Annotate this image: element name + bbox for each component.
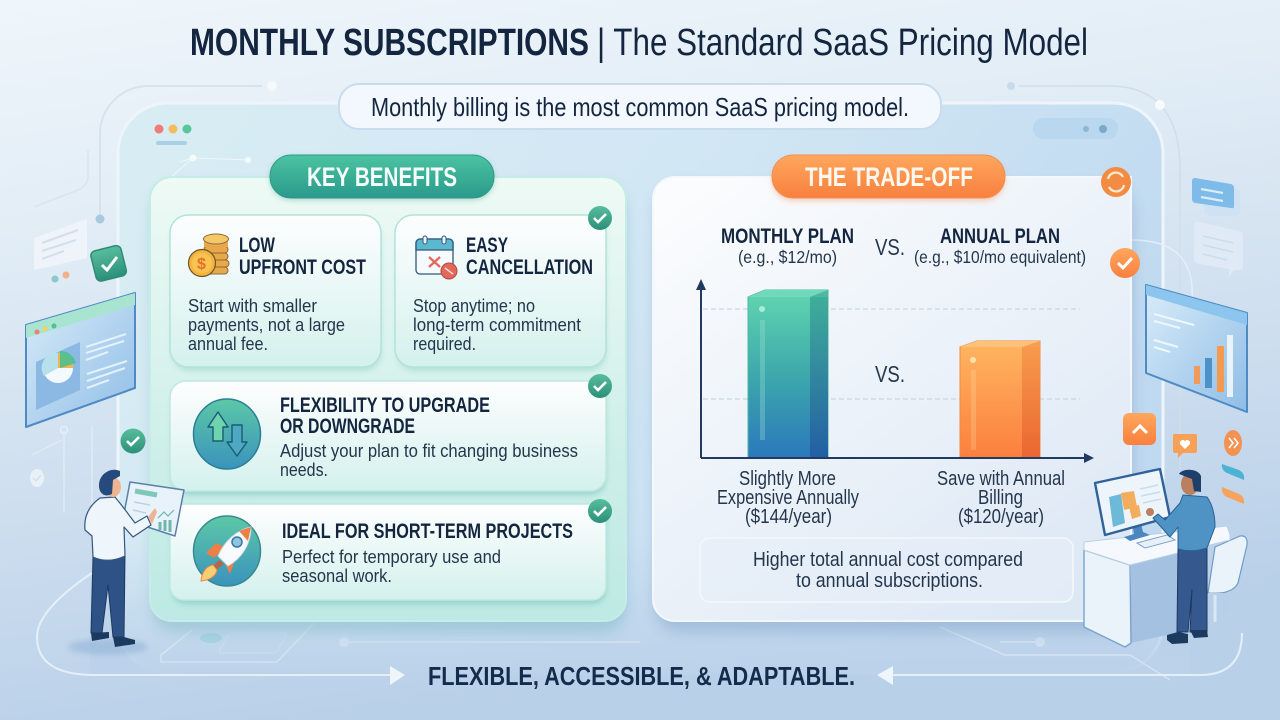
text: easy cancellation: required. — [413, 333, 476, 354]
text: short-term projects — [282, 546, 501, 586]
heading: flexibility: FLEXIBILITY TO UPGRADE — [280, 394, 490, 417]
arrow: footer right — [877, 666, 893, 685]
callout: higher annual cost — [700, 538, 1073, 602]
icon: orange refresh badge — [1101, 167, 1131, 197]
icon: check badge card 3 — [588, 374, 612, 398]
icon: coins: $ — [197, 256, 206, 273]
decorative colour tabs — [1222, 464, 1244, 504]
label: annual plan: (e.g., $10/mo equivalent) — [914, 247, 1086, 267]
person: right at desk — [1084, 469, 1247, 647]
label: vs top: VS. — [875, 234, 905, 260]
card: short-term projects — [170, 504, 606, 604]
title: MONTHLY SUBSCRIPTIONS — [190, 22, 589, 64]
text: easy cancellation — [413, 295, 581, 354]
chat bubbles right — [1192, 178, 1243, 277]
heading: key benefits: KEY BENEFITS — [307, 162, 457, 192]
chart axes — [696, 279, 1094, 463]
tablet — [123, 482, 184, 536]
label: annual plan: ANNUAL PLAN — [940, 225, 1060, 248]
arrow: footer left — [390, 666, 405, 685]
text: easy cancellation: Stop anytime; no — [413, 295, 535, 316]
card: easy cancellation — [395, 215, 606, 371]
text: easy cancellation: long-term commitment — [413, 314, 581, 335]
icon: heart bubble — [1173, 434, 1197, 458]
background app window frame — [30, 81, 1192, 675]
head — [105, 477, 121, 497]
label: monthly cost: Slightly More — [739, 468, 836, 490]
floor shapes — [200, 633, 1045, 653]
label: vs middle: VS. — [875, 361, 905, 387]
icon: up and down arrows — [194, 399, 260, 469]
icon: orange check badge — [1110, 248, 1140, 278]
bar: monthly plan — [748, 290, 828, 458]
icon: green check tile — [90, 245, 127, 282]
icon: green check left — [120, 428, 146, 454]
subtitle pill — [339, 84, 941, 129]
subtitle pill: Monthly billing is the most common SaaS pricing model. — [371, 92, 909, 122]
icon: check badge card 2 — [588, 206, 612, 230]
text: low upfront cost: payments, not a large — [188, 314, 345, 335]
shirt — [85, 497, 151, 560]
label: annual cost: Save with Annual — [937, 468, 1065, 490]
heading: short-term projects: IDEAL FOR SHORT-TERM PROJECTS — [282, 520, 573, 543]
icon: orange up chevron tile — [1123, 413, 1156, 445]
bar: annual plan — [960, 341, 1040, 458]
icon: rocket — [194, 516, 260, 586]
label: monthly cost: ($144/year) — [745, 506, 832, 528]
desk — [1084, 526, 1230, 647]
heading: key benefits — [270, 155, 494, 200]
text: low upfront cost: annual fee. — [188, 333, 268, 354]
panel: the trade-off — [653, 155, 1133, 632]
heading: easy cancellation: CANCELLATION — [466, 256, 593, 279]
label: annual cost: Billing — [978, 487, 1023, 509]
text: flexibility — [280, 440, 578, 480]
icon: coins — [188, 234, 229, 276]
text: low upfront cost — [188, 295, 345, 354]
chair — [1208, 536, 1247, 622]
heading: easy cancellation: EASY — [466, 234, 508, 257]
person body — [1146, 470, 1215, 644]
label: monthly cost: Expensive Annually — [717, 487, 859, 509]
label: annual plan — [914, 225, 1086, 267]
heading: low upfront cost: UPFRONT COST — [239, 256, 366, 279]
label: monthly plan: MONTHLY PLAN — [721, 225, 854, 248]
text: flexibility: Adjust your plan to fit changing business — [280, 440, 578, 461]
window control dots — [154, 124, 192, 145]
heading: the trade-off: THE TRADE-OFF — [805, 162, 973, 192]
text: flexibility: needs. — [280, 459, 328, 480]
title — [190, 22, 1088, 64]
heading: easy cancellation — [466, 234, 593, 279]
heading: low upfront cost: LOW — [239, 234, 275, 257]
label: monthly cost — [717, 468, 859, 528]
label: annual cost: ($120/year) — [958, 506, 1044, 528]
icon: calendar — [416, 236, 457, 279]
icon: check badge card 4 — [588, 499, 612, 523]
card: flexibility — [170, 381, 606, 495]
heading: flexibility — [280, 394, 490, 438]
footer tagline: FLEXIBLE, ACCESSIBLE, & ADAPTABLE. — [428, 661, 855, 691]
floating note left — [34, 219, 87, 282]
callout: higher annual cost: to annual subscriptions. — [796, 569, 983, 592]
person: left with tablet — [68, 470, 184, 655]
callout: higher annual cost: Higher total annual cost compared — [753, 548, 1023, 571]
floating dashboard right — [1146, 285, 1247, 412]
card: low upfront cost — [170, 215, 381, 371]
title: | The Standard SaaS Pricing Model — [597, 22, 1088, 64]
bar chart — [696, 279, 1094, 463]
floor circuit lines — [161, 623, 1170, 680]
panel: key benefits — [150, 155, 626, 632]
heading: flexibility: OR DOWNGRADE — [280, 415, 415, 438]
floating dashboard left — [26, 293, 135, 427]
footer connector lines — [37, 573, 1242, 675]
text: short-term projects: seasonal work. — [282, 565, 392, 586]
heading: low upfront cost — [239, 234, 366, 279]
label: annual cost — [937, 468, 1065, 528]
text: short-term projects: Perfect for temporary use and — [282, 546, 501, 567]
trousers — [91, 555, 125, 637]
text: low upfront cost: Start with smaller — [188, 295, 317, 316]
window search pill — [1033, 118, 1118, 139]
icon: orange signal badge — [1224, 430, 1242, 456]
heading: the trade-off — [772, 155, 1005, 201]
label: monthly plan — [721, 225, 854, 267]
monitor — [1095, 469, 1170, 541]
label: monthly plan: (e.g., $12/mo) — [738, 247, 837, 267]
